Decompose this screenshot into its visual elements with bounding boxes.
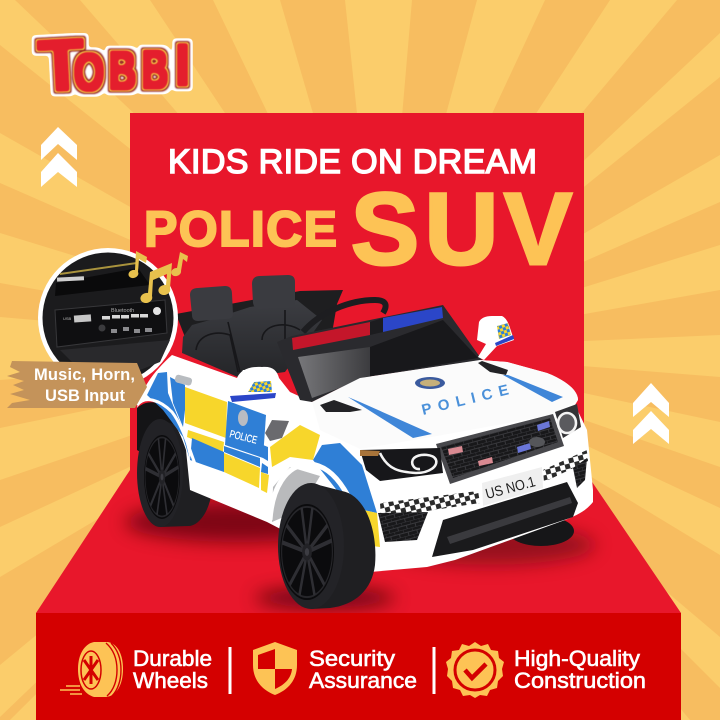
left headlight <box>360 448 443 481</box>
hood police text: POLICE <box>420 382 510 419</box>
seats <box>182 275 322 378</box>
text: durable wheels: Durable <box>133 646 212 671</box>
logo: Tobbi: B <box>109 41 136 101</box>
hood <box>312 360 578 449</box>
text: security assurance: Assurance <box>309 668 417 693</box>
side livery <box>147 372 380 547</box>
lower bumper <box>378 458 587 557</box>
door police text: POLICE <box>228 428 258 447</box>
side mirror left <box>230 370 288 402</box>
far front tire <box>508 516 574 546</box>
divider <box>228 647 232 694</box>
front wheel <box>278 483 375 609</box>
rear wheel and arch <box>137 402 213 527</box>
callout: wooden sign <box>7 361 147 408</box>
callout: USB and music inset <box>38 248 178 388</box>
rear frame behind seats <box>176 290 343 350</box>
icon: music notes <box>129 251 188 303</box>
logo: Tobbi <box>36 25 190 107</box>
front wheel arch <box>270 464 372 565</box>
callout: wooden sign: Music, Horn, <box>34 366 135 384</box>
bottom feature band <box>36 613 681 720</box>
callout: USB and music inset: Bluetooth <box>111 308 134 314</box>
icon: right chevrons <box>633 383 669 444</box>
icon: security shield <box>253 642 297 695</box>
right headlight <box>555 404 581 438</box>
text: durable wheels: Wheels <box>133 668 208 693</box>
text: durable wheels <box>133 646 212 693</box>
checker stripes <box>380 450 588 518</box>
door badge <box>238 410 248 426</box>
podium: red backdrop and floor <box>36 113 681 613</box>
text: security assurance: Security <box>309 646 395 671</box>
windshield frame <box>277 305 482 402</box>
text: high-quality construction: Construction <box>514 668 646 693</box>
callout: wooden sign: USB Input <box>45 387 126 405</box>
icon: quality badge <box>446 642 504 698</box>
police SUV toy car <box>137 275 593 609</box>
heading: police: POLICE <box>144 201 337 257</box>
icon: durable wheel <box>60 642 123 697</box>
text: high-quality construction: High-Quality <box>514 646 640 671</box>
police light bar <box>292 307 443 350</box>
logo: Tobbi: I <box>175 33 190 98</box>
icon: left chevrons <box>41 127 77 187</box>
license plate: US NO.1 <box>484 474 537 503</box>
rear wheel arch trim <box>137 400 195 464</box>
divider <box>432 647 436 694</box>
side vent <box>265 420 289 441</box>
logo: Tobbi: O <box>74 44 104 102</box>
car body <box>137 355 593 572</box>
heading: suv: SUV <box>351 172 572 286</box>
side mirror right <box>477 316 514 360</box>
callout: USB and music inset: USB <box>63 316 72 321</box>
heading: kids ride on dream: KIDS RIDE ON DREAM <box>168 143 537 181</box>
front fascia: grille <box>436 414 564 484</box>
door handle <box>174 374 193 386</box>
text: high-quality construction <box>514 646 646 693</box>
text: security assurance <box>309 646 417 693</box>
logo: Tobbi: T <box>36 25 86 107</box>
windshield glass <box>298 320 478 398</box>
logo: Tobbi: B <box>142 40 168 100</box>
steering wheel <box>303 300 386 332</box>
